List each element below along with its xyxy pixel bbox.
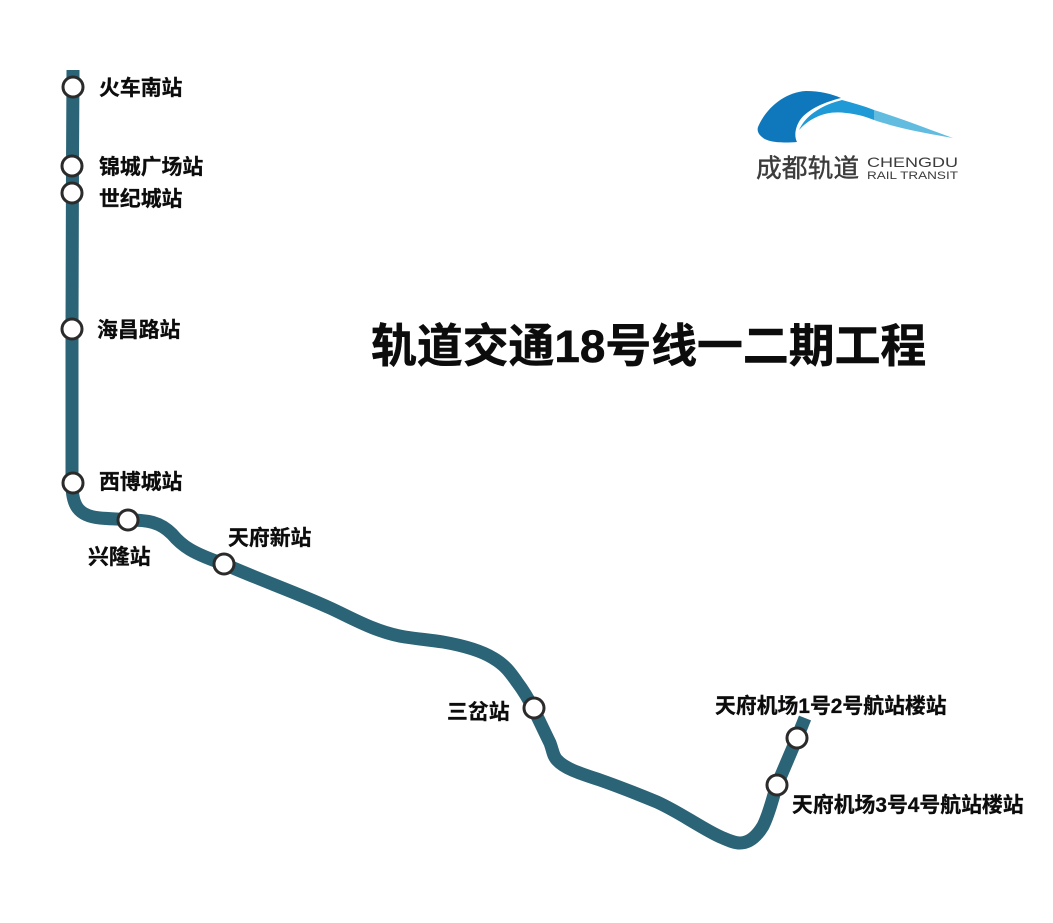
logo mark: dark blue wing (758, 91, 841, 142)
label: 火车南站: 火车南站 (99, 77, 183, 100)
station: 三岔站 (524, 698, 544, 718)
title: 轨道交通18号线一二期工程 (371, 320, 926, 372)
label: 锦城广场站: 锦城广场站 (99, 156, 203, 179)
station: 海昌路站 (62, 319, 82, 339)
label: 兴隆站: 兴隆站 (88, 546, 151, 569)
logo mark: pale tail (874, 110, 953, 138)
label: 西博城站: 西博城站 (99, 471, 183, 494)
label: 天府机场3号4号航站楼站: 天府机场3号4号航站楼站 (792, 793, 1024, 817)
label: 三岔站: 三岔站 (447, 701, 510, 724)
station markers (62, 77, 807, 795)
label: 海昌路站: 海昌路站 (97, 319, 181, 342)
station: 兴隆站 (118, 510, 138, 530)
station: 天府机场3号4号航站楼站 (767, 775, 787, 795)
logo text: CHENGDU: CHENGDU (867, 154, 958, 170)
route line 18 (72, 70, 805, 843)
logo mark: light blue wing (799, 100, 874, 130)
station: 天府新站 (214, 554, 234, 574)
label: 天府新站: 天府新站 (228, 526, 312, 550)
logo text: 成都轨道: 成都轨道 (756, 154, 859, 183)
station: 锦城广场站 (62, 156, 82, 176)
station: 天府机场1号2号航站楼站 (787, 728, 807, 748)
station labels (88, 77, 1024, 817)
station: 西博城站 (63, 473, 83, 493)
label: 世纪城站: 世纪城站 (99, 188, 183, 211)
logo text: RAIL TRANSIT: RAIL TRANSIT (867, 170, 958, 182)
station: 火车南站 (63, 77, 83, 97)
logo: Chengdu Rail Transit (756, 91, 958, 183)
station: 世纪城站 (62, 183, 82, 203)
label: 天府机场1号2号航站楼站: 天府机场1号2号航站楼站 (715, 694, 947, 718)
